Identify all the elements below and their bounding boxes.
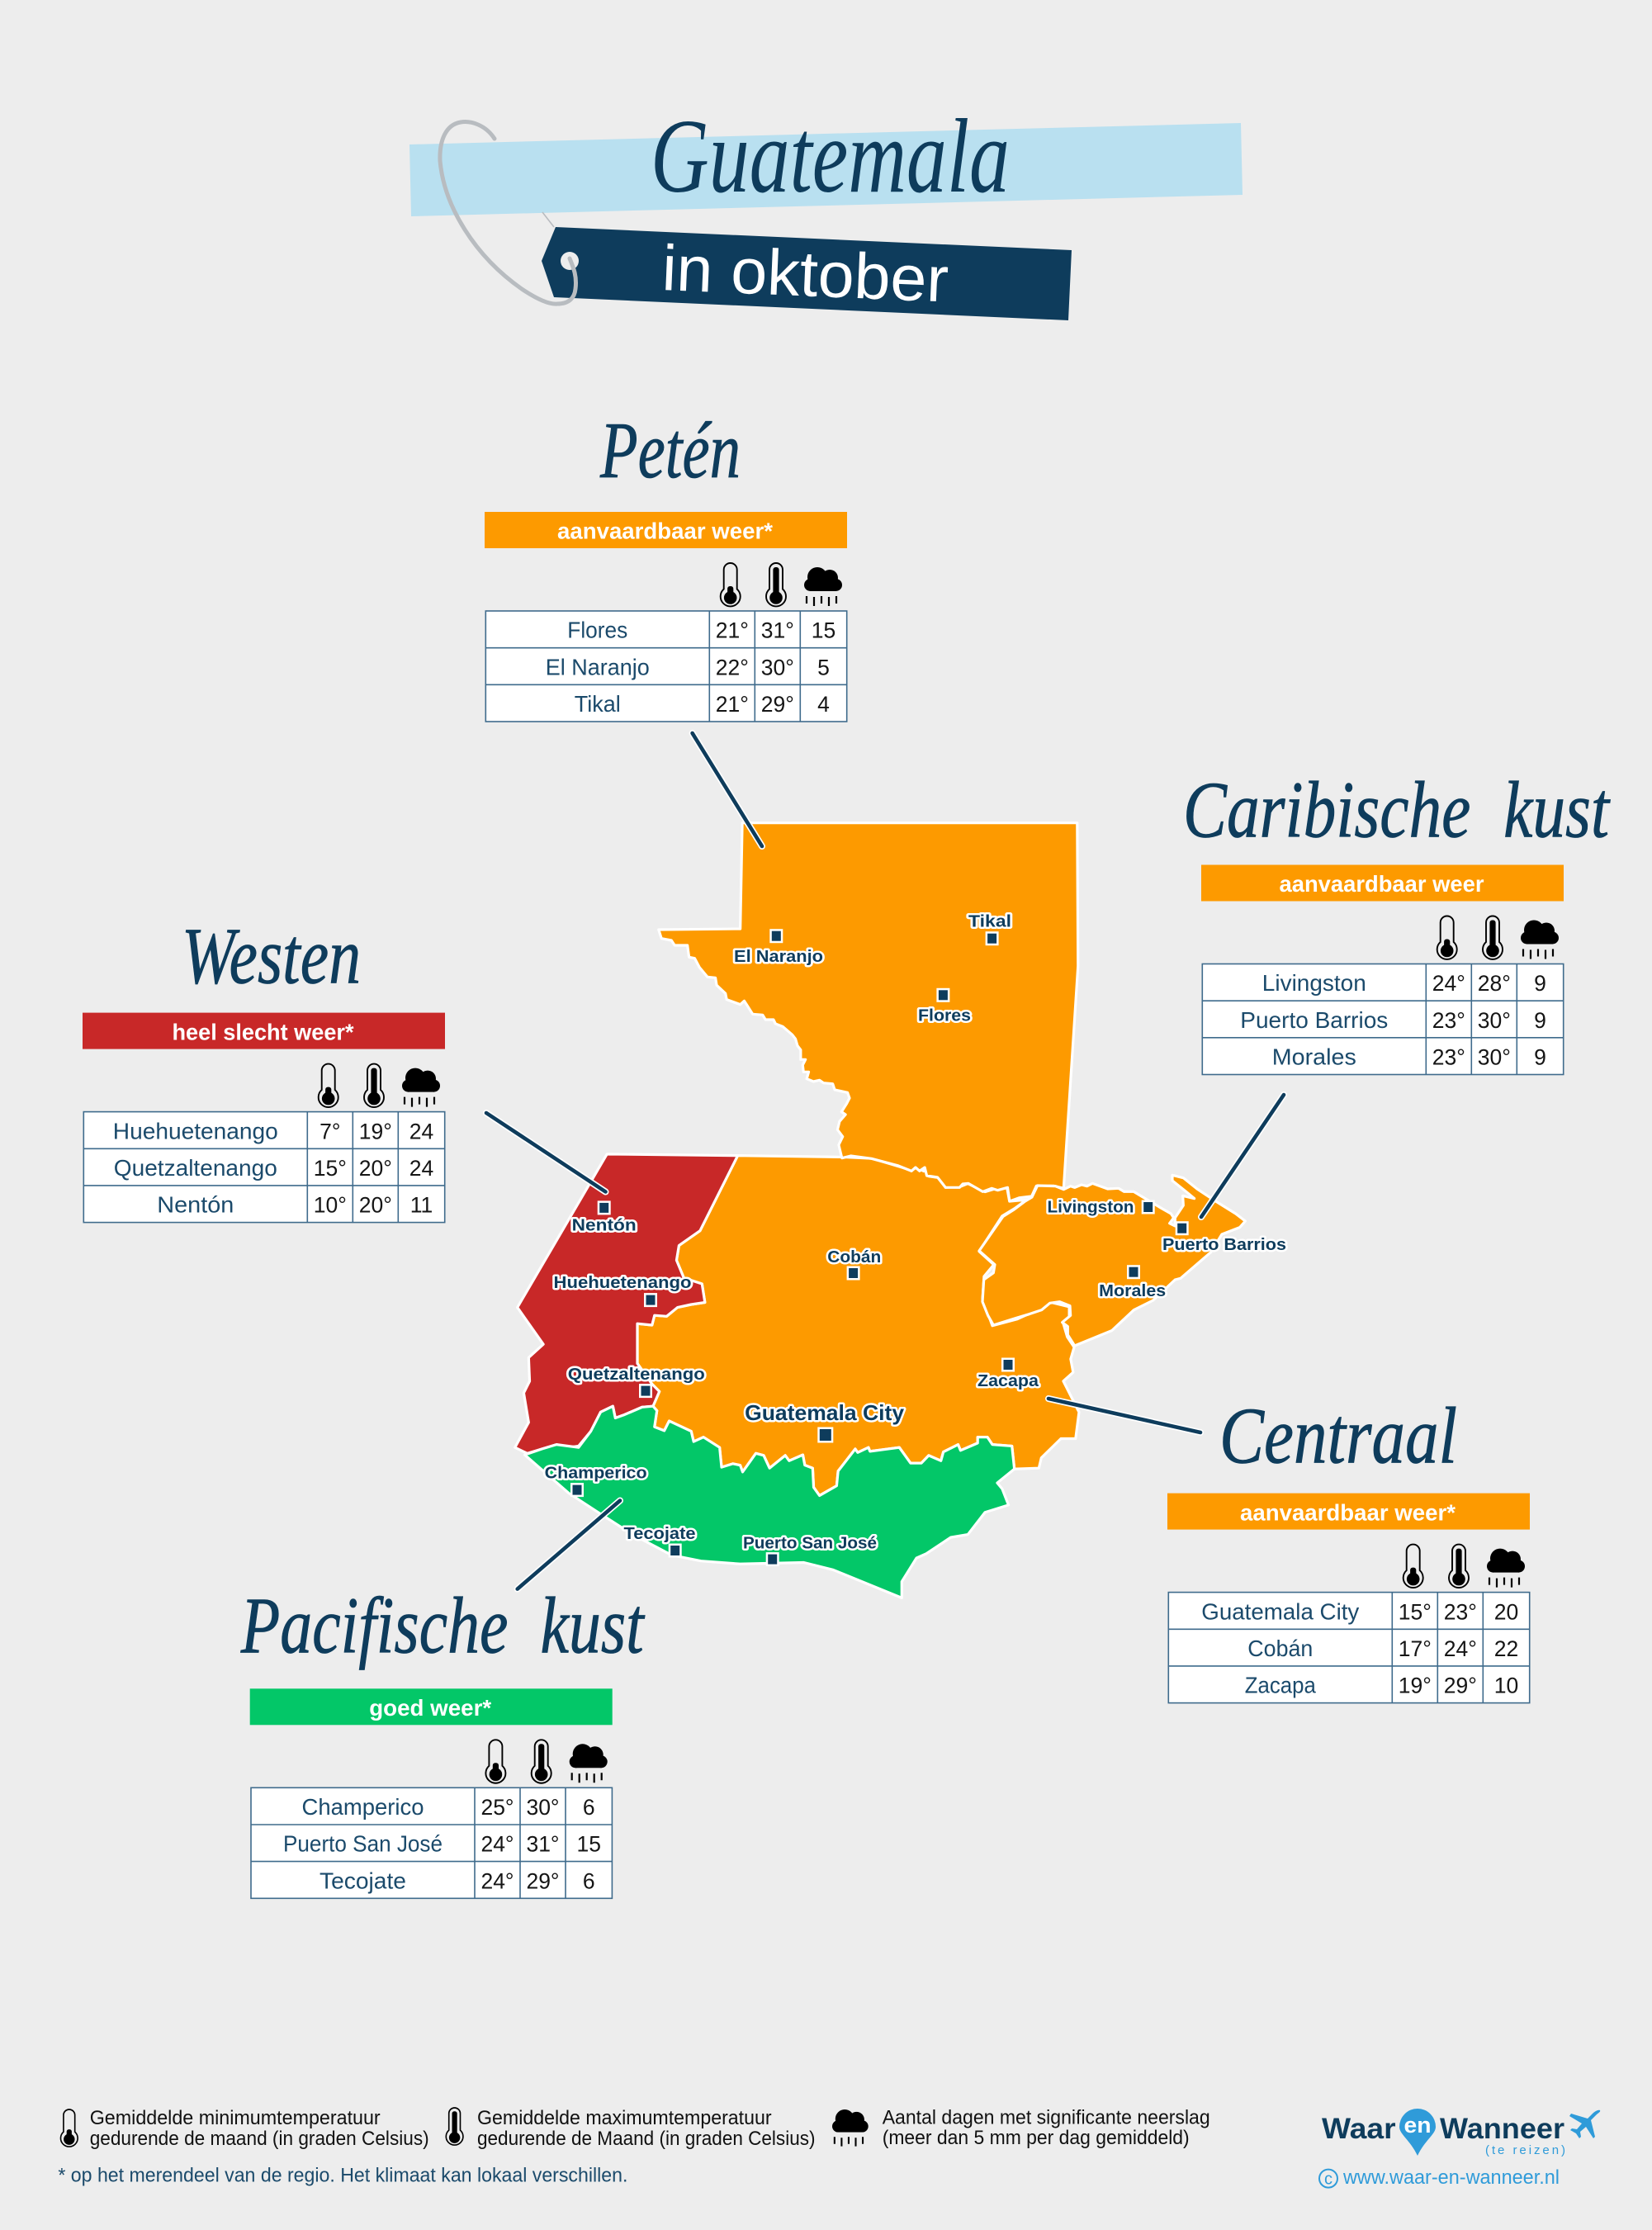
climate table: 9: [1534, 971, 1546, 996]
map of Guatemala: [515, 823, 1245, 1598]
climate table: 5: [817, 655, 830, 679]
icon: plane: [1569, 2110, 1600, 2138]
city labels: Quetzaltenango: [568, 1366, 705, 1384]
panel: Pacifische kust: [240, 1581, 646, 1898]
region: Centraal: [637, 1156, 1079, 1495]
panel: Westen: [83, 912, 445, 1223]
climate table: 10°: [314, 1193, 347, 1218]
climate table: Huehuetenango: [113, 1118, 278, 1143]
legend text: rain days: [883, 2107, 1210, 2149]
tag string strand: [542, 212, 554, 227]
city markers: [573, 931, 1186, 1565]
climate table: 24°: [1444, 1636, 1477, 1661]
climate table: Quetzaltenango: [114, 1155, 277, 1181]
region: Pacifische kust: [525, 1406, 1015, 1598]
climate table: 31°: [526, 1832, 560, 1857]
city labels: Cobán: [827, 1248, 881, 1267]
climate table: 20°: [359, 1193, 392, 1218]
climate table: Livingston: [1262, 970, 1366, 996]
climate table: 23°: [1444, 1599, 1477, 1624]
climate table: 24°: [480, 1868, 514, 1893]
arrow: Caribische kust leader: [1201, 1095, 1284, 1217]
climate table: 4: [817, 692, 830, 717]
climate table: 15: [812, 618, 835, 643]
climate table: 10: [1494, 1674, 1518, 1698]
arrow: Pacifische kust leader: [518, 1501, 620, 1589]
climate table: [1202, 964, 1564, 1075]
legend text: minimum temperature: gedurende de maand (in graden Celsius): [90, 2128, 429, 2150]
rating banner: [1167, 1494, 1530, 1530]
icons: min, max, rain: [485, 1740, 608, 1783]
climate table: Zacapa: [1245, 1673, 1316, 1698]
heading: Centraal: Centraal: [1219, 1392, 1457, 1481]
rating banner: [83, 1013, 445, 1049]
climate table: 22: [1494, 1636, 1518, 1661]
climate table: 25°: [480, 1795, 514, 1820]
legend text: minimum temperature: [90, 2107, 429, 2150]
climate table: 30°: [1478, 1008, 1511, 1033]
climate table: 6: [583, 1795, 595, 1820]
footnote: * op het merendeel van de regio. Het klimaat kan lokaal verschillen.: [58, 2165, 627, 2187]
icons: min, max, rain: [319, 1064, 440, 1107]
climate table: 11: [410, 1193, 433, 1218]
city labels: El Naranjo: [734, 948, 823, 966]
logo: Waar en Wanneer: Waar: [1322, 2113, 1396, 2145]
climate table: 9: [1534, 1045, 1546, 1070]
climate table: Flores: [567, 618, 627, 643]
website credit: www.waar-en-wanneer.nl: [1342, 2166, 1560, 2189]
legend text: minimum temperature: Gemiddelde minimumtemperatuur: [90, 2107, 381, 2129]
region: Petén: [659, 823, 1078, 1201]
panel: Centraal: [1167, 1392, 1530, 1703]
climate table: Tecojate: [320, 1868, 406, 1893]
climate table: Nentón: [157, 1192, 234, 1218]
tag hole: [561, 252, 579, 270]
climate table: 20°: [359, 1156, 392, 1181]
climate table: 29°: [761, 692, 794, 717]
logo: Waar en Wanneer: [1322, 2109, 1600, 2157]
title: Guatemala: Guatemala: [651, 97, 1010, 215]
heading: Petén: Petén: [599, 406, 741, 495]
legend text: rain days: (meer dan 5 mm per dag gemiddeld): [883, 2127, 1190, 2149]
rating banner: heel slecht weer*: [172, 1019, 354, 1044]
rating banner: aanvaardbaar weer*: [557, 518, 773, 544]
legend text: rain days: Aantal dagen met significante neerslag: [883, 2107, 1210, 2129]
climate table: Tikal: [575, 691, 621, 717]
climate table: [251, 1787, 612, 1898]
climate table: Morales: [1272, 1044, 1356, 1070]
heading: Westen: Westen: [182, 912, 361, 1001]
climate table: Guatemala City: [1201, 1598, 1360, 1624]
website credit: c: [1324, 2170, 1332, 2188]
logo: Waar en Wanneer: (te reizen): [1485, 2143, 1565, 2157]
title band: [409, 123, 1243, 216]
city labels: Flores: [918, 1007, 971, 1025]
climate table: 15: [576, 1832, 601, 1857]
climate table: 22°: [716, 655, 749, 679]
rating banner: aanvaardbaar weer: [1280, 871, 1484, 897]
icon: rain: [832, 2109, 869, 2147]
rating banner: [485, 512, 847, 548]
climate table: Champerico: [302, 1794, 424, 1820]
tag ring: [440, 122, 576, 304]
climate table: 15°: [1399, 1599, 1432, 1624]
city labels: Tecojate: [624, 1525, 695, 1543]
city labels: Puerto San José: [743, 1535, 877, 1553]
city labels: Livingston: [1047, 1198, 1134, 1216]
arrow: Petén leader: [693, 733, 762, 846]
arrow: Westen leader: [486, 1113, 606, 1192]
rating banner: [250, 1688, 613, 1725]
city labels: Huehuetenango: [553, 1274, 692, 1292]
subtitle: in oktober: in oktober: [660, 231, 950, 316]
logo: Waar en Wanneer: Wanneer: [1440, 2113, 1564, 2145]
title block: [409, 97, 1243, 320]
climate table: [83, 1112, 445, 1223]
region: Caribische kust: [979, 1175, 1245, 1346]
icon: minimum temperature: [60, 2109, 78, 2147]
city labels: Puerto Barrios: [1162, 1236, 1286, 1254]
icon: maximum temperature: [446, 2108, 463, 2145]
climate table: 6: [583, 1868, 595, 1893]
climate table: 7°: [320, 1119, 340, 1143]
climate table: 19°: [359, 1119, 392, 1143]
legend text: maximum temperature: gedurende de Maand (in graden Celsius): [477, 2128, 816, 2150]
climate table: 28°: [1478, 971, 1511, 996]
title tag: [542, 227, 1072, 320]
climate table: 29°: [1444, 1674, 1477, 1698]
legend text: maximum temperature: Gemiddelde maximumtemperatuur: [477, 2107, 772, 2129]
climate table: [1168, 1593, 1530, 1703]
city labels: Zacapa: [977, 1372, 1039, 1390]
city labels: Guatemala City: [745, 1400, 905, 1425]
climate table: 29°: [526, 1868, 560, 1893]
climate table: 24°: [480, 1832, 514, 1857]
climate table: 23°: [1432, 1045, 1465, 1070]
climate table: Puerto San José: [283, 1831, 443, 1857]
climate table: 17°: [1399, 1636, 1432, 1661]
icons: min, max, rain: [1437, 916, 1559, 959]
arrow: Centraal leader: [1048, 1399, 1200, 1432]
city labels: Champerico: [545, 1465, 647, 1483]
climate table: Puerto Barrios: [1240, 1007, 1388, 1033]
rating banner: [1201, 865, 1564, 902]
climate table: 21°: [716, 618, 749, 643]
climate table: 30°: [1478, 1045, 1511, 1070]
climate table: 9: [1534, 1008, 1546, 1033]
city labels: [545, 913, 1286, 1553]
climate table: 30°: [761, 655, 794, 679]
climate table: 23°: [1432, 1008, 1465, 1033]
climate table: 30°: [526, 1795, 560, 1820]
climate table: 24°: [1432, 971, 1465, 996]
region: Westen: [515, 1154, 738, 1453]
climate table: 19°: [1399, 1674, 1432, 1698]
icons: min, max, rain: [721, 563, 842, 606]
climate table: 31°: [761, 618, 794, 643]
climate table: 15°: [314, 1156, 347, 1181]
city labels: Nentón: [572, 1217, 637, 1235]
climate table: 24: [409, 1119, 433, 1143]
panel: Petén: [485, 406, 847, 722]
climate table: 20: [1494, 1599, 1518, 1624]
logo: Waar en Wanneer: en: [1403, 2113, 1432, 2138]
heading: Pacifische kust: Pacifische kust: [240, 1581, 646, 1670]
climate table: 21°: [716, 692, 749, 717]
rating banner: aanvaardbaar weer*: [1240, 1499, 1456, 1525]
rating banner: goed weer*: [369, 1695, 491, 1721]
city labels: Tikal: [968, 913, 1011, 931]
climate table: El Naranjo: [546, 654, 650, 679]
legend text: maximum temperature: [477, 2107, 816, 2150]
climate table: 24: [409, 1156, 433, 1181]
icon: map pin: [1399, 2109, 1436, 2156]
climate table: Cobán: [1247, 1636, 1313, 1661]
panel: Caribische kust: [1183, 766, 1611, 1075]
climate table: [485, 611, 847, 722]
icons: min, max, rain: [1403, 1545, 1525, 1588]
city labels: Morales: [1099, 1282, 1166, 1300]
legend: [58, 2107, 1210, 2187]
